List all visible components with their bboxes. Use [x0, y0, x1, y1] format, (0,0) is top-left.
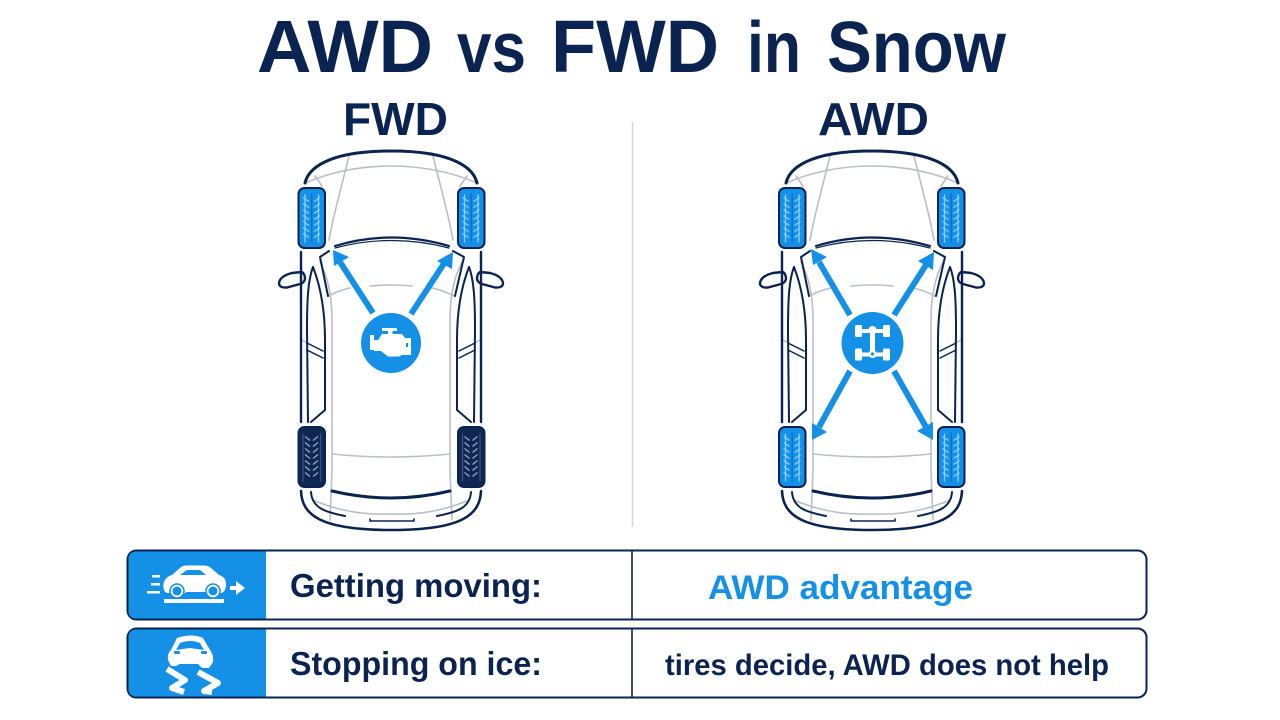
title: AWD [257, 5, 433, 88]
arrow: to front left tire [811, 249, 850, 315]
arrow: engine to front left tire [333, 250, 373, 313]
arrow: to rear left tire [812, 371, 850, 440]
label: getting moving: Getting moving: [290, 567, 542, 604]
heading: AWD: AWD [818, 93, 929, 145]
divider between cars [632, 122, 634, 527]
value: AWD advantage: AWD advantage [708, 569, 973, 607]
car outline: FWD [279, 151, 503, 530]
label: stopping on ice: Stopping on ice: [290, 645, 542, 682]
icon: front left tire, driven [298, 188, 325, 248]
icon: drivetrain [842, 312, 904, 374]
panel: FWD [279, 93, 503, 530]
icon: car moving [147, 566, 245, 603]
icon: rear left tire [779, 427, 806, 487]
car outline: AWD [760, 151, 984, 530]
row icon panel [128, 630, 266, 696]
row: stopping on ice [128, 628, 1146, 698]
arrow: engine to front right tire [411, 252, 453, 314]
value: tires decide: tires decide, AWD does not help [665, 649, 1109, 682]
icon: rear right tire, undriven [458, 427, 484, 487]
icon: car skidding [167, 636, 218, 692]
row frame [128, 550, 1146, 620]
title: FWD [551, 5, 719, 88]
icon: rear left tire, undriven [298, 427, 325, 487]
panel: AWD [760, 93, 984, 530]
row icon panel [128, 552, 266, 618]
heading: FWD: FWD [343, 93, 448, 145]
icon: front right tire, driven [458, 188, 484, 248]
icon: front right tire [938, 188, 964, 248]
title: Snow [827, 8, 1007, 88]
title [257, 5, 1007, 88]
row: getting moving [128, 550, 1146, 620]
icon: rear right tire [938, 427, 964, 487]
column divider [631, 551, 633, 619]
column divider [631, 629, 633, 697]
title: vs [457, 9, 526, 88]
arrow: to rear right tire [894, 371, 933, 440]
icon: front left tire [779, 188, 806, 248]
row frame [128, 628, 1146, 698]
title: in [747, 8, 801, 88]
icon: engine [361, 313, 421, 373]
arrow: to front right tire [894, 252, 934, 315]
